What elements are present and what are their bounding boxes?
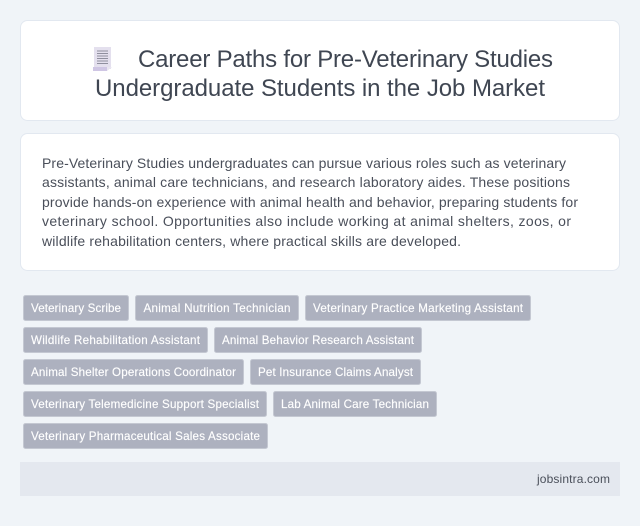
tag: Animal Behavior Research Assistant [222, 334, 415, 347]
panel: title card [20, 20, 620, 120]
tag: Veterinary Practice Marketing Assistant [313, 302, 524, 315]
title [95, 46, 553, 102]
tag [24, 328, 208, 352]
panel: description [20, 134, 620, 270]
description text: provide hands-on experience with animal health and behavior, preparing students for [42, 194, 578, 210]
tag: Veterinary Scribe [31, 302, 121, 315]
footer: jobsintra.com [536, 472, 610, 486]
description text: veterinary school. Opportunities also include working at animal shelters, zoos, or [42, 213, 571, 229]
tag [214, 328, 422, 352]
title: Undergraduate Students in the Job Market [95, 75, 545, 102]
tag [306, 296, 530, 320]
description text: assistants, animal care technicians, and research laboratory aides. These positions [42, 174, 570, 190]
tag [136, 296, 298, 320]
title: Career Paths for Pre-Veterinary Studies [138, 46, 553, 73]
description text [41, 155, 578, 249]
tag [24, 296, 128, 320]
tag: Pet Insurance Claims Analyst [258, 366, 414, 379]
tag list [24, 296, 530, 448]
tag [24, 360, 244, 384]
tag: Wildlife Rehabilitation Assistant [31, 334, 201, 347]
tag [274, 392, 436, 416]
tag [250, 360, 420, 384]
tag: Animal Nutrition Technician [144, 302, 290, 315]
tag: Lab Animal Care Technician [281, 398, 429, 411]
tag: Veterinary Pharmaceutical Sales Associate [31, 430, 260, 443]
description text: Pre-Veterinary Studies undergraduates can pursue various roles such as veterinary [42, 155, 566, 171]
tag: Animal Shelter Operations Coordinator [31, 366, 236, 379]
tag [24, 392, 266, 416]
footer [20, 462, 620, 496]
tag [24, 424, 268, 448]
tag: Veterinary Telemedicine Support Specialist [31, 398, 260, 411]
description text: wildlife rehabilitation centers, where practical skills are developed. [41, 233, 461, 249]
icon: scroll [93, 47, 112, 71]
